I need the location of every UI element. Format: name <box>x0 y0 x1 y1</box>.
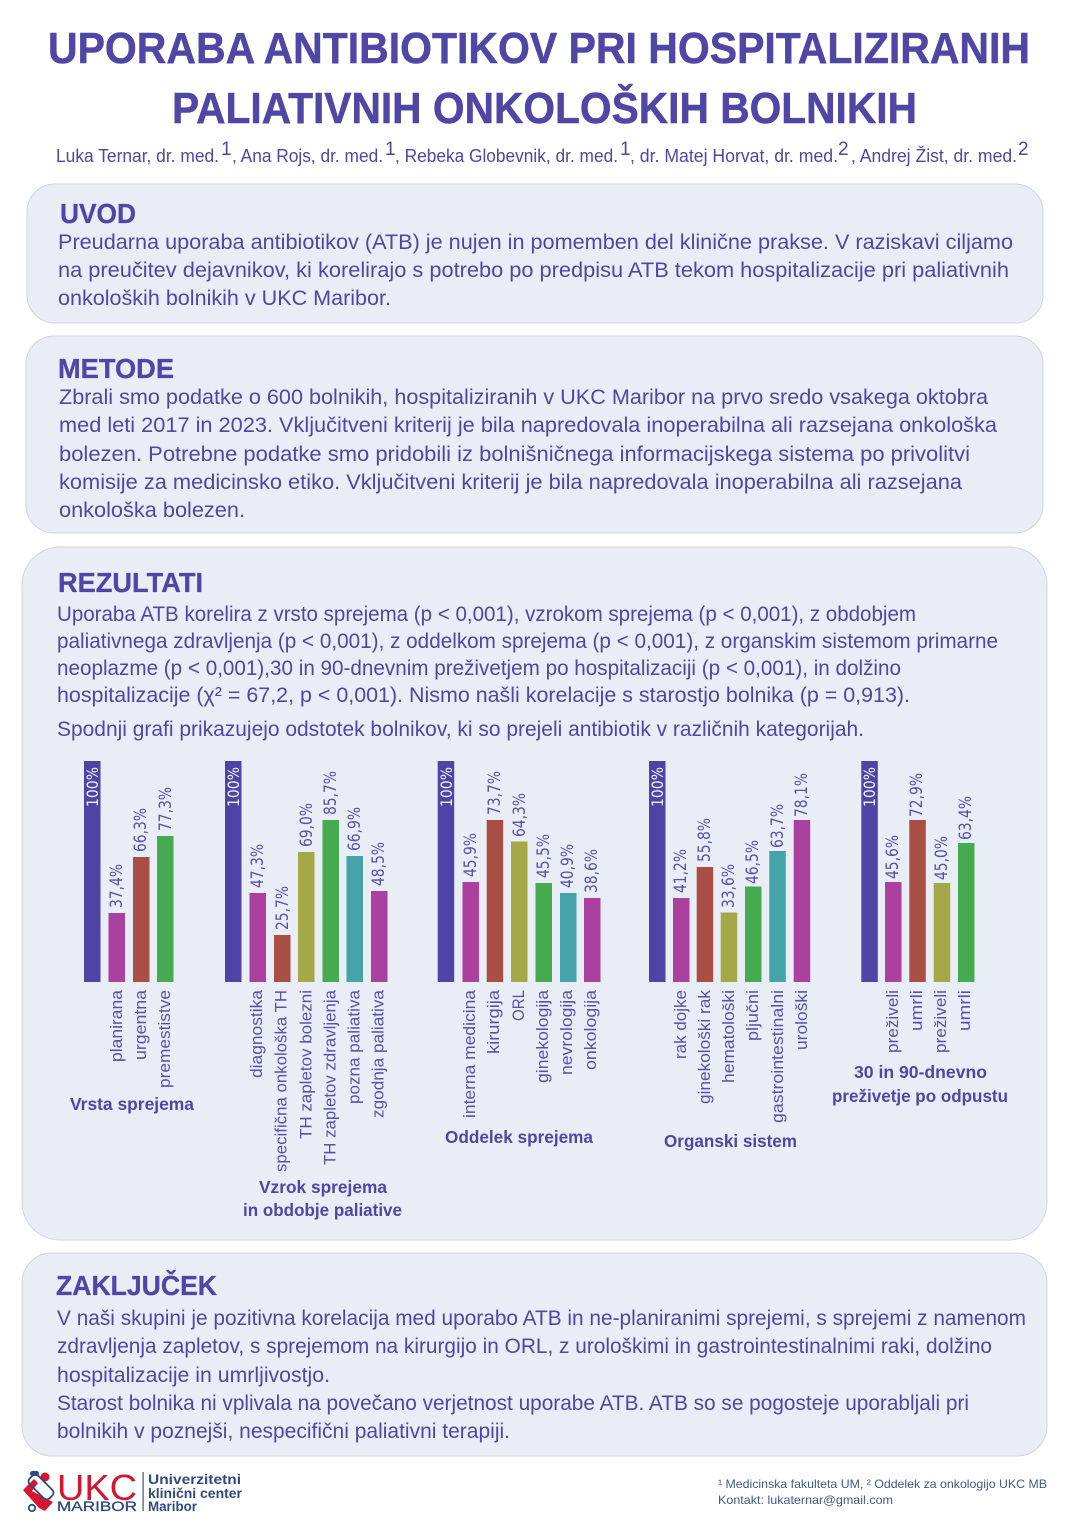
logo: UKC Maribor <box>23 1467 243 1514</box>
panel: uvod <box>27 184 1043 323</box>
bar chart: vzrok sprejema in obdobje paliative: pozna paliativa <box>344 989 364 1104</box>
bar chart: vzrok sprejema in obdobje paliative: TH zapletov bolezni <box>296 990 316 1139</box>
authors: , Rebeka Globevnik, dr. med. <box>395 146 618 166</box>
bar chart: oddelek sprejema: 38,6% <box>582 849 601 893</box>
heading: uvod: UVOD <box>60 198 136 229</box>
authors: , Andrej Žist, dr. med. <box>851 146 1017 166</box>
bar chart: organski sistem: 46,5% <box>743 840 762 884</box>
bar chart: vzrok sprejema in obdobje paliative: 48,5% <box>369 842 388 886</box>
heading: zaključek: ZAKLJUČEK <box>56 1269 217 1301</box>
bar chart: organski sistem: rak dojke <box>671 990 690 1059</box>
bar chart: vrsta sprejema: 77,3% <box>156 787 175 831</box>
text: zaključek <box>57 1307 1026 1443</box>
bar chart: vzrok sprejema in obdobje paliative: 66,9% <box>345 807 364 851</box>
icon: logo mark <box>23 1471 55 1511</box>
text: rezultati: hospitalizacije (χ² = 67,2, p < 0,001). Nismo našli korelacije s starostjo bolnika (p = 0,913). <box>57 684 910 707</box>
bar chart: vzrok sprejema in obdobje paliative: diagnostika <box>247 989 266 1078</box>
chart title: vzrok sprejema: in obdobje paliative <box>243 1200 402 1220</box>
bar chart: organski sistem: urološki <box>792 990 811 1050</box>
bar chart: vzrok sprejema in obdobje paliative: specifična onkološka TH <box>272 990 290 1172</box>
logo: UKC Maribor: UKC <box>57 1467 137 1508</box>
authors: 1 <box>620 139 631 160</box>
bar chart: 30 in 90-dnevno preživetje: 100% <box>860 767 879 807</box>
heading: metode: METODE <box>58 353 174 384</box>
authors: 1 <box>221 139 232 160</box>
bar chart: 30 in 90-dnevno preživetje: 45,0% <box>932 836 951 880</box>
bar chart: vrsta sprejema: 100% <box>83 767 102 807</box>
text: rezultati: Uporaba ATB korelira z vrsto sprejema (p < 0,001), vzrokom sprejema (p < 0,001), z obdobjem <box>57 603 916 626</box>
text: zaključek: zdravljenja zapletov, s sprejemom na kirurgijo in ORL, z urološkimi in gastrointestinalnimi raki, dolžino <box>57 1335 992 1358</box>
text: uvod <box>58 231 1013 310</box>
text: uvod: na preučitev dejavnikov, ki korelirajo s potrebo po predpisu ATB tekom hospitalizacije pri paliativnih <box>58 259 1009 282</box>
footer: affiliations and contact <box>718 1477 1047 1507</box>
text: rezultati <box>57 603 998 741</box>
chart title: preživetje po odpustu: preživetje po odpustu <box>832 1086 1008 1106</box>
bar chart: organski sistem: gastrointestinalni <box>768 990 787 1123</box>
text: metode: med leti 2017 in 2023. Vključitveni kriterij je bila napredovala inoperabilna ali razsejana onkološka <box>59 414 997 437</box>
chart title: preživetje po odpustu: 30 in 90-dnevno <box>854 1062 987 1082</box>
authors: , Ana Rojs, dr. med. <box>232 146 383 166</box>
chart title: preživetje po odpustu <box>832 1062 1008 1106</box>
bar chart: 30 in 90-dnevno preživetje: 72,9% <box>907 773 926 817</box>
authors: 2 <box>1018 139 1029 160</box>
authors: Luka Ternar, dr. med. <box>56 146 219 166</box>
bar chart: vzrok sprejema in obdobje paliative <box>224 761 402 1220</box>
heading: rezultati: REZULTATI <box>58 567 203 598</box>
bar chart: oddelek sprejema: ORL <box>509 990 528 1021</box>
panel: metode <box>26 336 1043 533</box>
bar chart: 30 in 90-dnevno preživetje: umrli <box>955 990 974 1031</box>
bar chart: organski sistem: 33,6% <box>719 864 738 908</box>
text: uvod: onkoloških bolnikih v UKC Maribor. <box>58 287 391 310</box>
bar chart: oddelek sprejema: 40,9% <box>558 844 577 888</box>
bar chart: vrsta sprejema: 37,4% <box>107 864 126 908</box>
bar chart: oddelek sprejema: ginekologija <box>533 989 552 1083</box>
text: rezultati: neoplazme (p < 0,001),30 in 90-dnevnim preživetjem po hospitalizaciji (p < 0,001), in dolžino <box>57 657 901 680</box>
text: rezultati: Spodnji grafi prikazujejo odstotek bolnikov, ki so prejeli antibiotik v različnih kategorijah. <box>57 718 864 741</box>
footer: affiliations and contact: ¹ Medicinska fakulteta UM, ² Oddelek za onkologijo UKC MB <box>718 1477 1047 1491</box>
bar chart: 30 in 90-dnevno preživetje: 45,6% <box>883 835 902 879</box>
bar chart: organski sistem: 63,7% <box>768 804 787 848</box>
bar chart: vzrok sprejema in obdobje paliative: 47,3% <box>248 844 267 888</box>
panel: rezultati <box>22 547 1047 1240</box>
bar chart: organski sistem <box>648 761 811 1151</box>
logo: UKC Maribor: MARIBOR <box>57 1499 137 1514</box>
bar chart: oddelek sprejema: 100% <box>437 767 456 807</box>
bar chart: vzrok sprejema in obdobje paliative: 25,7% <box>273 886 292 930</box>
bar chart: oddelek sprejema: onkologija <box>581 989 600 1070</box>
bar chart: oddelek sprejema: interna medicina <box>460 989 479 1118</box>
bar chart: oddelek sprejema: 73,7% <box>485 771 504 815</box>
title: PALIATIVNIH ONKOLOŠKIH BOLNIKIH <box>172 82 917 133</box>
bar chart: vzrok sprejema in obdobje paliative: 100% <box>224 767 243 807</box>
text: uvod: Preudarna uporaba antibiotikov (ATB) je nujen in pomemben del klinične prakse. V raziskavi ciljamo <box>58 231 1013 254</box>
bar chart: oddelek sprejema: 64,3% <box>510 793 529 837</box>
text: metode: komisije za medicinsko etiko. Vključitveni kriterij je bila napredovala inoperabilna ali razsejana <box>59 471 962 494</box>
bar chart: organski sistem: hematološki <box>719 990 738 1083</box>
authors <box>56 139 1029 166</box>
bar chart: vzrok sprejema in obdobje paliative: 69,0% <box>297 803 316 847</box>
logo: UKC Maribor: Univerzitetni <box>148 1471 241 1487</box>
authors: 2 <box>838 139 849 160</box>
panel: zaključek <box>22 1253 1047 1456</box>
text: zaključek: hospitalizacije in umrljivostjo. <box>57 1364 330 1387</box>
logo: UKC Maribor: klinični center <box>148 1485 243 1501</box>
bar chart: organski sistem: 100% <box>648 767 667 807</box>
bar chart: oddelek sprejema: kirurgija <box>484 989 503 1054</box>
bar chart: oddelek sprejema: nevrologija <box>557 989 576 1075</box>
bar chart: 30 in 90-dnevno preživetje: preživeli <box>883 990 902 1053</box>
footer: affiliations and contact: Kontakt: lukaternar@gmail.com <box>718 1493 893 1507</box>
bar chart: organski sistem: ginekološki rak <box>695 990 714 1104</box>
text: metode <box>59 386 997 522</box>
bar chart: vrsta sprejema: premestistve <box>155 990 174 1088</box>
chart title: vrsta sprejema: Vrsta sprejema <box>70 1094 194 1114</box>
bar chart: vzrok sprejema in obdobje paliative: TH zapletov zdravljenja <box>320 989 340 1165</box>
text: zaključek: V naši skupini je pozitivna korelacija med uporabo ATB in ne-planiranimi sprejemi, s sprejemi z namenom <box>57 1307 1026 1330</box>
chart title: vzrok sprejema <box>243 1177 402 1220</box>
logo: UKC Maribor: Maribor <box>148 1498 198 1514</box>
bar chart: 30 in 90-dnevno preživetje: preživeli <box>931 990 950 1053</box>
bar chart: vrsta sprejema <box>70 761 194 1114</box>
title: UPORABA ANTIBIOTIKOV PRI HOSPITALIZIRANIH <box>48 24 1030 73</box>
bar chart: vrsta sprejema: urgentna <box>131 989 150 1060</box>
bar chart: organski sistem: 41,2% <box>671 849 690 893</box>
bar chart: organski sistem: pljučni <box>743 990 762 1041</box>
authors: , dr. Matej Horvat, dr. med. <box>630 146 838 166</box>
text: metode: onkološka bolezen. <box>59 499 245 522</box>
bar chart: vzrok sprejema in obdobje paliative: zgodnja paliativa <box>368 989 388 1118</box>
text: rezultati: paliativnega zdravljenja (p < 0,001), z oddelkom sprejema (p < 0,001), z organskim sistemom primarne <box>57 630 998 653</box>
bar chart: oddelek sprejema <box>437 761 601 1147</box>
text: zaključek: bolnikih v poznejši, nespecifični paliativni terapiji. <box>57 1420 510 1443</box>
bar chart: vzrok sprejema in obdobje paliative: 85,7% <box>321 771 340 815</box>
bar chart: oddelek sprejema: 45,5% <box>534 834 553 878</box>
bar chart: 30 in 90-dnevno preživetje <box>832 761 1008 1106</box>
bar chart: vrsta sprejema: 66,3% <box>131 808 150 852</box>
chart title: vzrok sprejema: Vzrok sprejema <box>259 1177 387 1197</box>
bar chart: oddelek sprejema: 45,9% <box>461 833 480 877</box>
chart title: organski sistem: Organski sistem <box>664 1131 797 1151</box>
bar chart: 30 in 90-dnevno preživetje: umrli <box>907 990 926 1031</box>
text: zaključek: Starost bolnika ni vplivala na povečano verjetnost uporabe ATB. ATB so se pogosteje uporabljali pri <box>57 1392 969 1415</box>
chart title: oddelek sprejema: Oddelek sprejema <box>445 1127 593 1147</box>
bar chart: organski sistem: 78,1% <box>792 773 811 817</box>
bar chart: 30 in 90-dnevno preživetje: 63,4% <box>956 796 975 840</box>
bar chart: organski sistem: 55,8% <box>695 818 714 862</box>
text: metode: bolezen. Potrebne podatke smo pridobili iz bolnišničnega informacijskega sistema po privolitvi <box>59 443 970 466</box>
title <box>48 24 1030 133</box>
authors: 1 <box>385 139 396 160</box>
bar chart: vrsta sprejema: planirana <box>107 989 126 1062</box>
text: metode: Zbrali smo podatke o 600 bolnikih, hospitaliziranih v UKC Maribor na prvo sredo vsakega oktobra <box>59 386 988 409</box>
